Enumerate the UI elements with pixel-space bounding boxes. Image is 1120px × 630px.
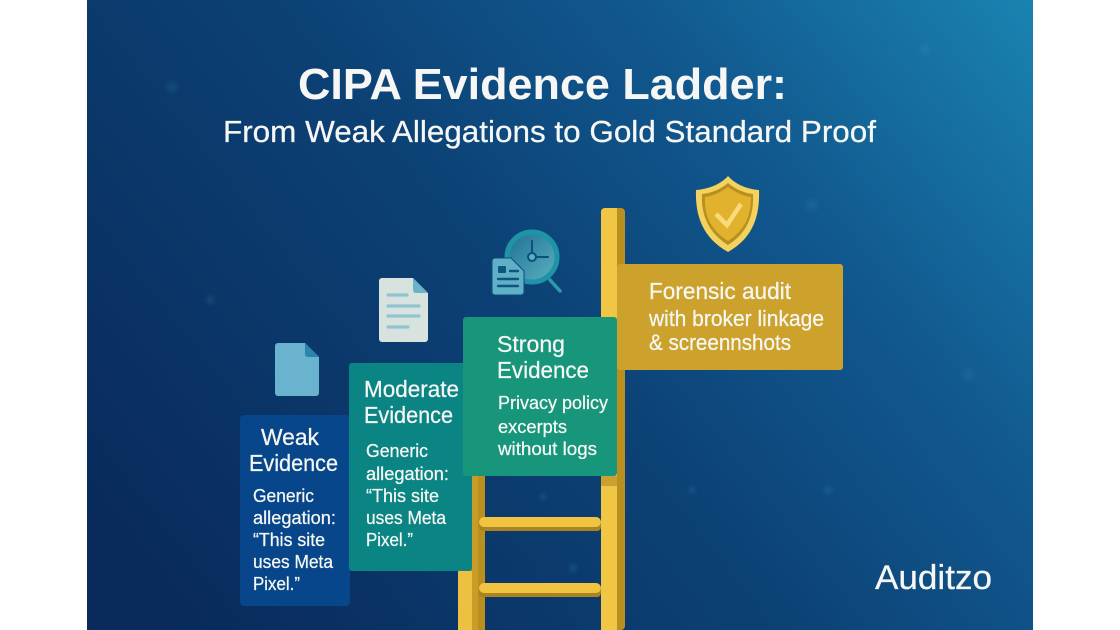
text: moderate evidence description: allegation: bbox=[366, 464, 449, 484]
subtitle: From Weak Allegations to Gold Standard Proof bbox=[223, 114, 876, 149]
panel: moderate evidence bbox=[349, 363, 472, 571]
icon: text document bbox=[379, 278, 428, 342]
heading: weak evidence bbox=[249, 424, 338, 476]
text: moderate evidence description: uses Meta bbox=[366, 508, 447, 528]
text: weak evidence description bbox=[253, 486, 336, 594]
heading: moderate evidence: Evidence bbox=[364, 402, 453, 428]
title: CIPA Evidence Ladder: bbox=[298, 60, 787, 109]
heading: weak evidence: Weak bbox=[261, 424, 319, 450]
logo: Auditzo: Auditzo bbox=[875, 559, 992, 597]
text: forensic audit description: with broker linkage bbox=[648, 306, 824, 331]
text: weak evidence description: allegation: bbox=[253, 508, 336, 528]
text: strong evidence description: Privacy policy bbox=[498, 393, 608, 413]
heading: moderate evidence bbox=[364, 376, 459, 428]
icon: document bbox=[275, 343, 319, 396]
text: moderate evidence description: “This site bbox=[366, 486, 439, 506]
heading: strong evidence: Evidence bbox=[497, 357, 589, 383]
panel: forensic audit bbox=[617, 264, 843, 370]
text: weak evidence description: Pixel.” bbox=[253, 574, 300, 594]
heading: weak evidence: Evidence bbox=[249, 450, 338, 476]
text: weak evidence description: uses Meta bbox=[253, 552, 334, 572]
panel: weak evidence bbox=[240, 415, 350, 606]
text: forensic audit description bbox=[648, 278, 824, 355]
icon: shield with check bbox=[696, 176, 759, 252]
text: moderate evidence description bbox=[366, 441, 449, 550]
text: strong evidence description bbox=[497, 393, 608, 459]
heading: moderate evidence: Moderate bbox=[364, 376, 459, 402]
text: forensic audit description: & screennshots bbox=[649, 330, 791, 355]
text: strong evidence description: without logs bbox=[497, 439, 597, 459]
text: forensic audit description: Forensic audit bbox=[649, 278, 792, 304]
text: strong evidence description: excerpts bbox=[498, 417, 567, 437]
heading: strong evidence: Strong bbox=[497, 331, 565, 357]
text: moderate evidence description: Generic bbox=[366, 441, 428, 461]
panel: strong evidence bbox=[463, 317, 617, 476]
heading: strong evidence bbox=[497, 331, 589, 383]
ladder bbox=[458, 208, 625, 630]
icon: clock magnifier with document bbox=[492, 232, 560, 295]
text: moderate evidence description: Pixel.” bbox=[366, 530, 413, 550]
text: weak evidence description: “This site bbox=[253, 530, 325, 550]
text: weak evidence description: Generic bbox=[253, 486, 314, 506]
